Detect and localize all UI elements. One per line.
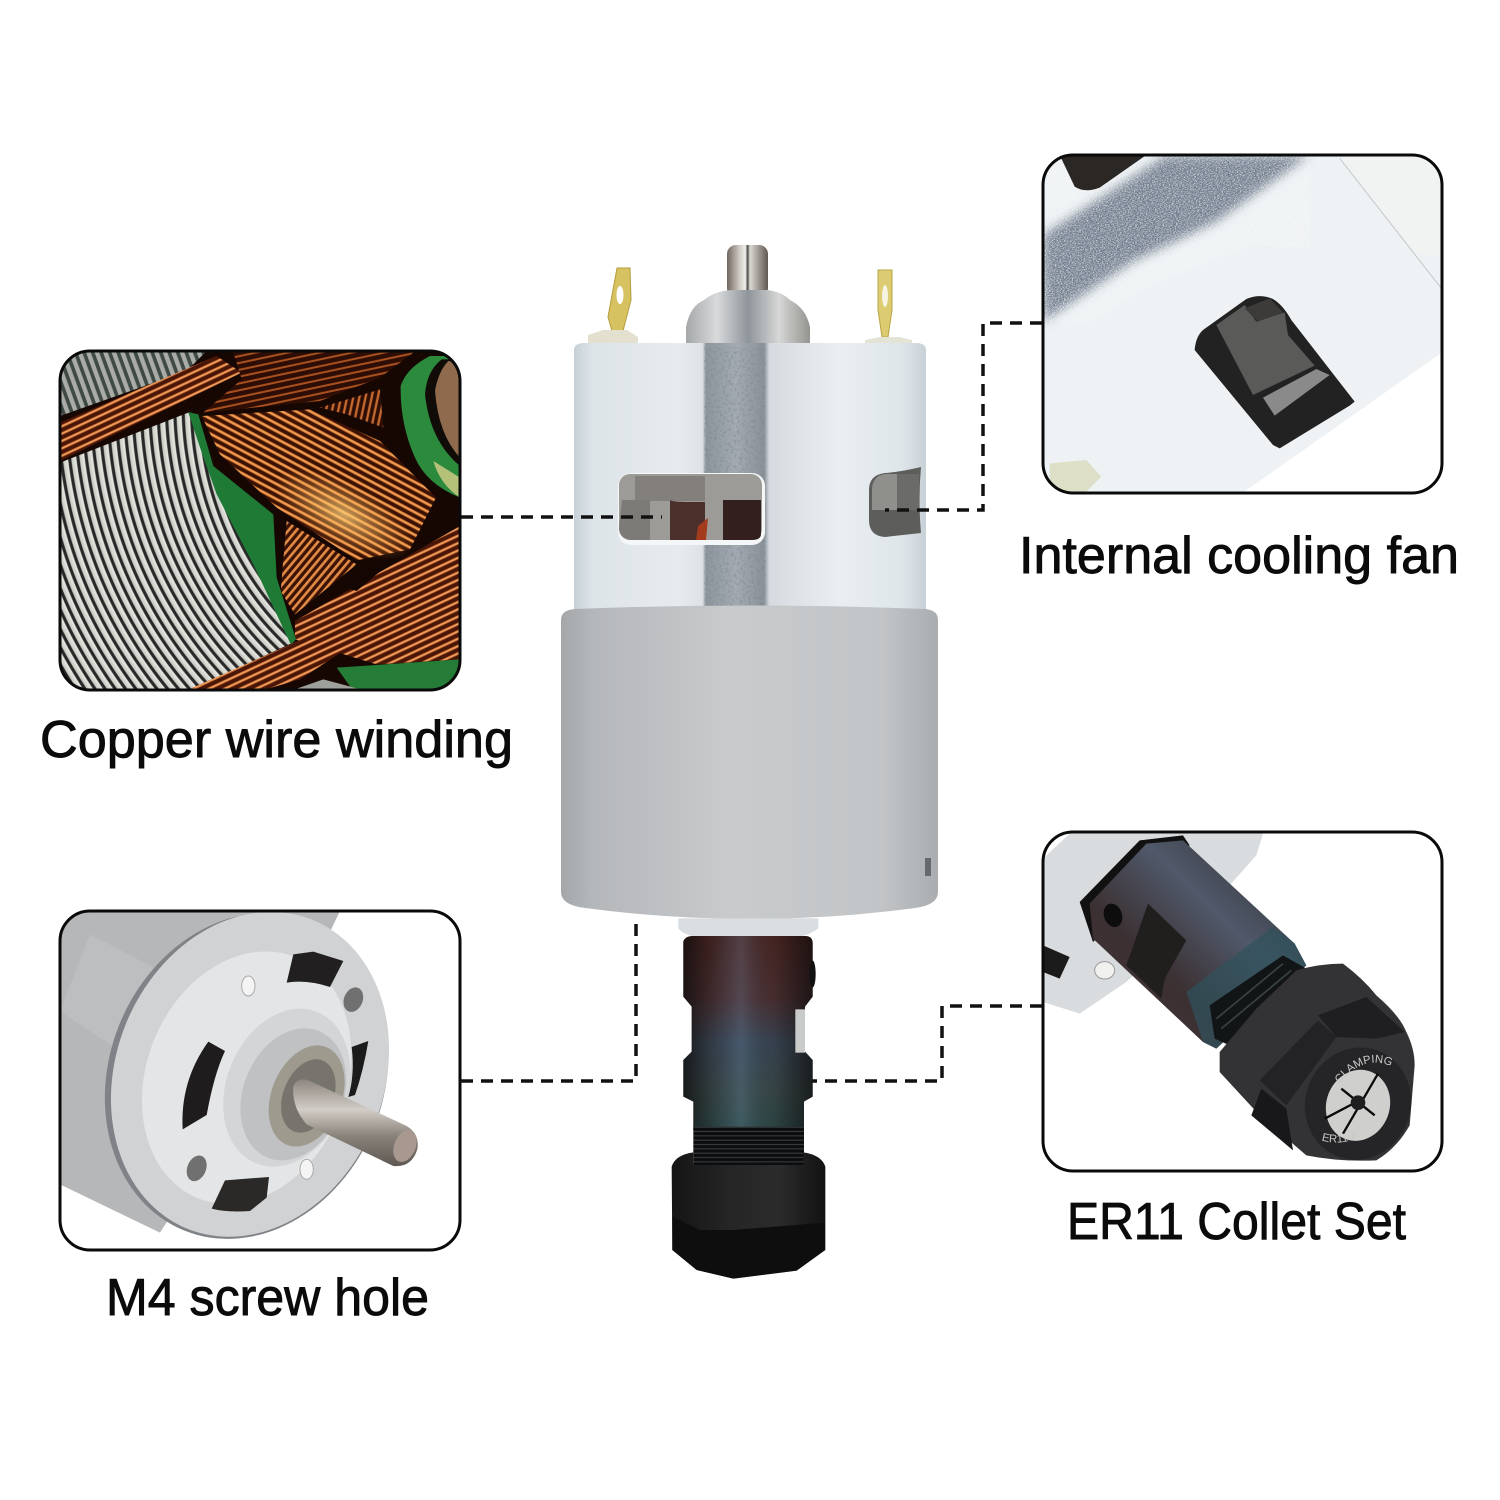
label: internal cooling fan: Internal cooling fan: [1019, 527, 1459, 585]
set screw hole: [1100, 901, 1126, 930]
nut side facet: [1251, 1089, 1293, 1150]
top vent: [287, 952, 343, 987]
lamination bottom: [297, 679, 357, 688]
terminal nub: [1050, 460, 1101, 492]
flat: [1126, 904, 1186, 999]
collet face: [1316, 1061, 1400, 1150]
body seam: [1340, 158, 1441, 288]
panel: internal cooling fan: [1043, 155, 1443, 495]
connector: copper panel to vent: [461, 515, 662, 519]
panel: copper wire winding: [60, 351, 460, 691]
thread: [1210, 955, 1306, 1045]
vent lower block: [1263, 369, 1330, 416]
bearing: [268, 1045, 345, 1146]
green insulation: [188, 412, 296, 644]
rivet upper: [242, 976, 255, 996]
label: ER11 collet set: ER11 Collet Set: [1067, 1193, 1407, 1251]
upper rear wires: [203, 353, 413, 413]
motor shaft: [727, 245, 768, 297]
nut flat right: [1318, 997, 1405, 1039]
cover band: [1043, 245, 1443, 495]
side vent: [1195, 296, 1355, 448]
collet nut: [672, 1152, 825, 1279]
collet shading: [683, 936, 813, 1130]
panel: ER11 collet set: [1042, 830, 1444, 1172]
shading on face: [142, 952, 352, 1203]
green ring: [401, 356, 460, 498]
shaft: [293, 1079, 418, 1166]
shaft end: [393, 1130, 417, 1162]
ring highlight: [435, 361, 460, 458]
engraved text model: ER11-A: [1322, 1133, 1348, 1143]
motor sleeve: [561, 606, 938, 919]
blue sheen: [1186, 927, 1306, 1049]
connector: M4 panel to motor base: [461, 920, 636, 1081]
engraving arc lower: [1321, 1125, 1376, 1143]
main copper bundle: [202, 409, 436, 560]
connector: ER11 panel to collet: [812, 1006, 1042, 1081]
motor body: [60, 911, 340, 1233]
right terminal: [865, 270, 912, 348]
collet bore: [1351, 1095, 1365, 1110]
nut flat left: [1260, 1020, 1336, 1105]
screw hole lower: [186, 1156, 207, 1182]
motor end section: [1340, 155, 1443, 288]
right lower bundle: [295, 526, 460, 664]
collet thread: [693, 1127, 804, 1168]
top vent: [1060, 155, 1146, 190]
collet body: [1090, 840, 1306, 1049]
hub inner: [240, 1028, 346, 1160]
collet body: [683, 936, 813, 1130]
body seam: [60, 934, 167, 1051]
sleeve mark: [925, 858, 931, 876]
motor housing: [1043, 834, 1263, 1014]
vent inner block: [1216, 305, 1315, 395]
band grit: [1043, 155, 1310, 322]
vent inner notch: [1245, 298, 1283, 322]
hub: [223, 1008, 350, 1166]
dark gap: [350, 572, 380, 591]
top wire bundle: [60, 356, 242, 461]
stator lamination top: [60, 351, 207, 416]
bottom vent: [212, 1177, 269, 1211]
bearing inner: [281, 1059, 336, 1133]
panel: M4 screw hole: [58, 910, 462, 1252]
bundle highlight: [278, 472, 408, 558]
motor bolt: [1095, 962, 1115, 979]
end face: [111, 912, 389, 1237]
can band texture: [704, 347, 766, 609]
ring interior: [425, 359, 460, 466]
lower small bundle: [281, 521, 357, 614]
green insulation bottom: [337, 659, 460, 691]
set screw hole: [810, 961, 816, 987]
nut body: [1220, 964, 1415, 1161]
right vent: [869, 467, 921, 537]
motor end bell: [686, 290, 810, 347]
rivet lower: [300, 1159, 313, 1179]
engraving arc: [1340, 1063, 1408, 1084]
white background corner: [1240, 352, 1443, 495]
left vent: [618, 473, 765, 545]
central spindle motor: [561, 245, 938, 1279]
left vent: [182, 1042, 225, 1129]
label: copper wire winding: Copper wire winding: [40, 711, 513, 769]
rim: [104, 915, 388, 1239]
connector: fan panel to right vent: [885, 323, 1042, 510]
bottom wire bundle: [191, 640, 340, 688]
label: M4 screw hole: M4 screw hole: [106, 1269, 429, 1327]
rear vertical wires: [320, 389, 383, 428]
right lamination: [433, 461, 460, 498]
motor can: [574, 343, 926, 620]
screw hole upper: [344, 987, 364, 1012]
thread highlight: [1216, 964, 1291, 1029]
nut face: [1289, 1032, 1427, 1175]
flat on collet: [795, 1009, 805, 1053]
brushed band: [1043, 155, 1310, 322]
bearing neck: [678, 918, 818, 937]
motor vent: [1043, 945, 1070, 979]
right vent: [348, 1041, 368, 1097]
lower collet assembly: [672, 918, 825, 1279]
collet slots: [1325, 1074, 1378, 1134]
engraved text clamping: CLAMPING: [1336, 1054, 1392, 1080]
nut hex facet: [672, 1217, 825, 1279]
retaining ring: [1080, 835, 1190, 942]
left terminal: [588, 268, 638, 348]
stator lamination main: [60, 413, 295, 691]
